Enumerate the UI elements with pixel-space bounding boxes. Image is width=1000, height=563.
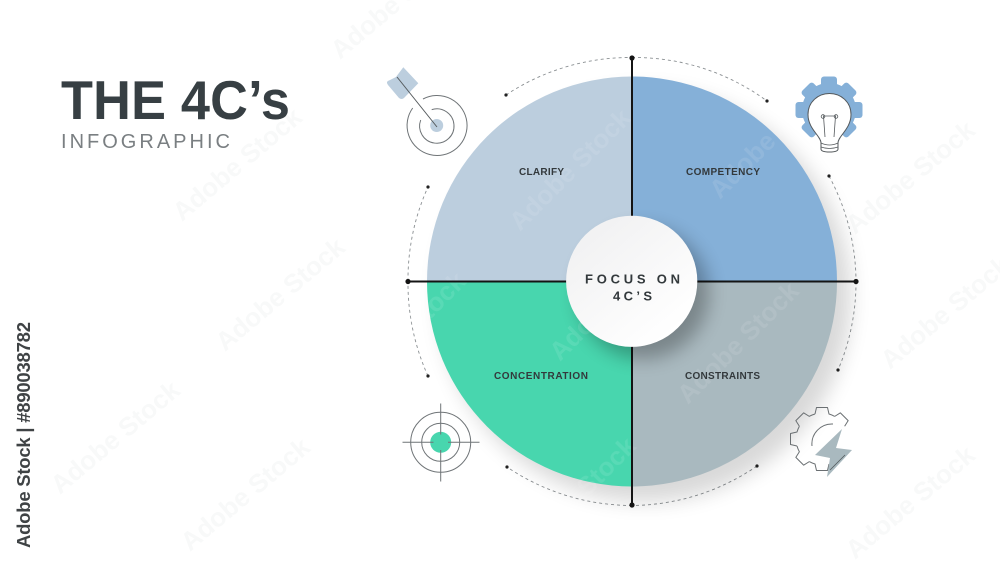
title (61, 70, 290, 153)
dashed outer ring (408, 57, 856, 506)
pie chart: four quadrants (427, 76, 837, 486)
watermark: Adobe Stock (543, 232, 677, 366)
label: clarify: CLARIFY (519, 167, 564, 178)
pie shadow (439, 90, 851, 502)
center hub: FOCUS ON (585, 272, 680, 286)
watermark: Adobe Stock (703, 70, 837, 204)
faint background watermark: Adobe Stock (167, 101, 308, 227)
icon: light bulb gear (796, 76, 862, 152)
icon: arrow in target (387, 67, 467, 155)
center hub shadow (577, 227, 709, 359)
axis lines (405, 55, 859, 508)
quadrant labels (494, 167, 760, 382)
watermark: Adobe Stock (508, 430, 642, 563)
label: concentration: CONCENTRATION (494, 371, 588, 382)
label: competency: COMPETENCY (686, 167, 760, 178)
center hub (566, 216, 697, 347)
faint background watermark: Adobe Stock (175, 431, 316, 557)
watermark: Adobe Stock (503, 102, 637, 236)
watermark: Adobe Stock (338, 265, 472, 399)
stock id side label: Adobe Stock | #890038782 (13, 322, 34, 548)
faint background watermark: Adobe Stock (45, 374, 186, 500)
icon: gear with lightning bolt (790, 408, 852, 477)
quadrant: concentration (427, 282, 632, 486)
quadrant: clarify (427, 76, 632, 282)
quadrant: constraints (632, 282, 837, 486)
center hub: 4C’S (613, 288, 652, 304)
quadrant: competency (632, 76, 837, 282)
heading: THE 4C's: THE 4C’s (61, 70, 290, 131)
ring end dots (426, 93, 840, 469)
icon: crosshair target (402, 404, 480, 482)
watermark: Adobe Stock (671, 275, 805, 409)
faint background watermark: Adobe Stock (840, 439, 981, 563)
watermark (338, 70, 837, 563)
faint background watermark: Adobe Stock (840, 114, 981, 240)
label: constraints: CONSTRAINTS (685, 371, 760, 382)
subheading: INFOGRAPHIC: INFOGRAPHIC (61, 131, 230, 153)
faint background watermark: Adobe Stock (210, 231, 351, 357)
